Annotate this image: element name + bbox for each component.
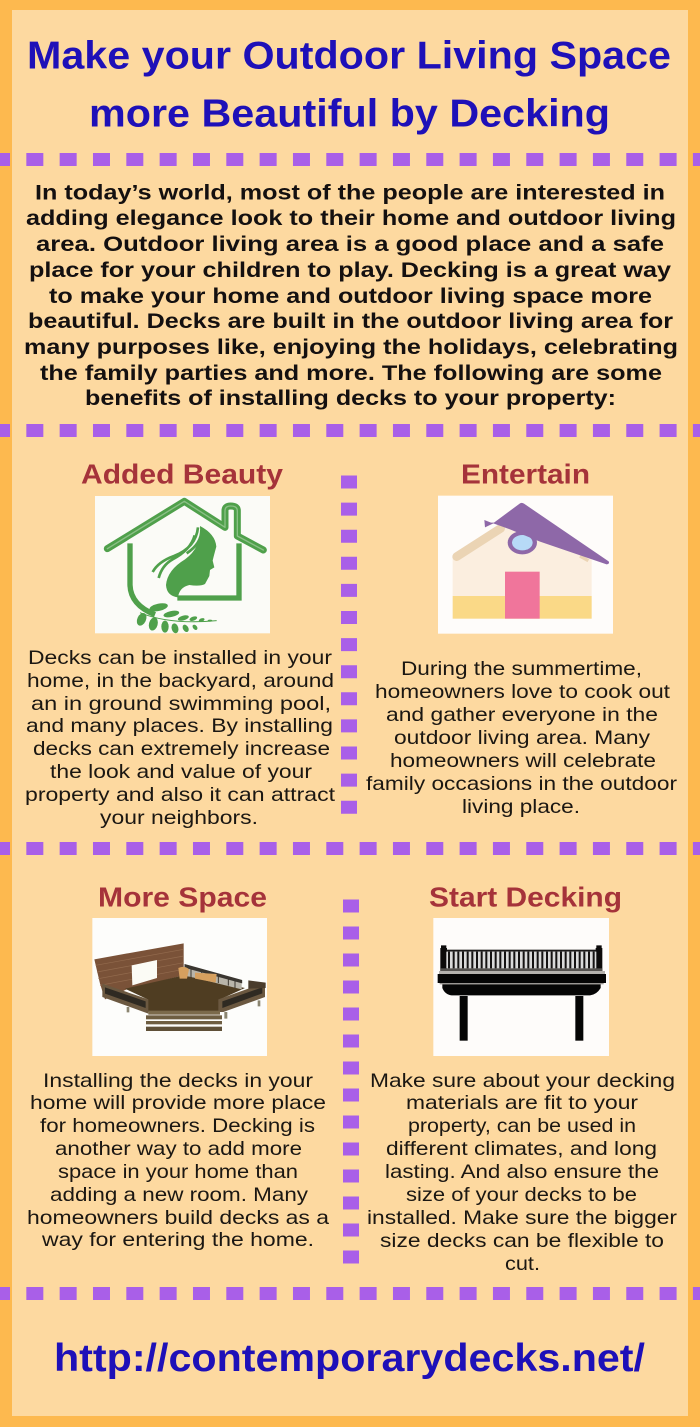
panel: added beauty <box>25 458 336 829</box>
heading: entertain: Entertain <box>461 458 590 490</box>
body text: start decking: Make sure about your decking <box>370 1070 675 1092</box>
body text: entertain: outdoor living area. Many <box>394 727 650 749</box>
body text: start decking: lasting. And also ensure the <box>385 1161 659 1183</box>
body text: entertain: homeowners will celebrate <box>390 750 656 772</box>
body text: added beauty: an in ground swimming pool, <box>31 693 331 715</box>
vertical divider: lower row <box>343 900 359 1264</box>
body text: start decking: property, can be used in <box>408 1115 636 1137</box>
body text: added beauty: and many places. By installing <box>26 715 333 737</box>
body text: more space: space in your home than <box>58 1161 298 1183</box>
intro paragraph: In today’s world, most of the people are interested in <box>35 180 665 204</box>
body text: added beauty <box>25 647 336 829</box>
body text: start decking: size of your decks to be <box>406 1184 637 1206</box>
intro paragraph <box>24 180 678 410</box>
website url: http://contemporarydecks.net/ <box>54 1337 645 1380</box>
intro paragraph: adding elegance look to their home and outdoor living <box>26 206 676 230</box>
body text: more space: another way to add more <box>55 1138 302 1160</box>
body text: entertain: During the summertime, <box>401 658 642 680</box>
heading: start decking: Start Decking <box>429 882 622 912</box>
icon: wooden deck <box>92 918 267 1056</box>
title: more Beautiful by Decking <box>89 92 610 136</box>
body text: start decking: different climates, and long <box>386 1138 657 1160</box>
body text: added beauty: decks can extremely increase <box>33 738 330 760</box>
intro paragraph: area. Outdoor living area is a good place and a safe <box>36 232 664 256</box>
body text: more space: for homeowners. Decking is <box>40 1115 315 1137</box>
body text: start decking: cut. <box>505 1253 540 1275</box>
intro paragraph: benefits of installing decks to your property: <box>85 386 616 410</box>
icon: green house with face <box>95 496 270 634</box>
title <box>27 34 671 136</box>
intro paragraph: the family parties and more. The following are some <box>40 361 662 385</box>
body text: start decking: size decks can be flexible to <box>380 1230 664 1252</box>
body text: more space: Installing the decks in your <box>43 1070 314 1092</box>
divider: middle <box>0 842 700 855</box>
body text: added beauty: the look and value of your <box>50 761 313 783</box>
body text: entertain: family occasions in the outdoor <box>366 773 678 795</box>
body text: more space: way for entering the home. <box>41 1229 314 1251</box>
title: Make your Outdoor Living Space <box>27 34 671 78</box>
heading: added beauty: Added Beauty <box>81 458 284 490</box>
icon: deck side elevation <box>433 918 609 1056</box>
body text: more space: homeowners build decks as a <box>27 1207 329 1229</box>
body text: entertain <box>366 658 678 818</box>
body text: more space <box>27 1070 329 1251</box>
body text: entertain: and gather everyone in the <box>386 704 658 726</box>
body text: entertain: living place. <box>462 796 580 818</box>
vertical divider: upper row <box>341 476 357 814</box>
body text: start decking: installed. Make sure the bigger <box>367 1207 678 1229</box>
intro paragraph: to make your home and outdoor living space more <box>49 284 652 308</box>
divider: below intro <box>0 424 700 437</box>
icon: house with purple roof <box>438 496 613 634</box>
body text: added beauty: Decks can be installed in your <box>28 647 333 669</box>
intro paragraph: many purposes like, enjoying the holidays, celebrating <box>24 335 678 359</box>
panel: more space <box>27 882 329 1251</box>
heading: more space: More Space <box>98 882 267 912</box>
body text: entertain: homeowners love to cook out <box>375 681 671 703</box>
divider: below title <box>0 153 700 166</box>
intro paragraph: place for your children to play. Decking is a great way <box>29 258 671 282</box>
intro paragraph: beautiful. Decks are built in the outdoor living area for <box>28 309 674 333</box>
body text: added beauty: property and also it can attract <box>25 784 336 806</box>
body text: added beauty: your neighbors. <box>100 807 258 829</box>
body text: start decking <box>367 1070 678 1275</box>
panel: start decking <box>367 882 678 1275</box>
body text: more space: adding a new room. Many <box>50 1184 308 1206</box>
divider: above url <box>0 1287 700 1300</box>
body text: more space: home will provide more place <box>30 1092 326 1114</box>
panel: entertain <box>366 458 678 818</box>
body text: added beauty: home, in the backyard, around <box>27 670 334 692</box>
body text: start decking: materials are fit to your <box>406 1092 639 1114</box>
